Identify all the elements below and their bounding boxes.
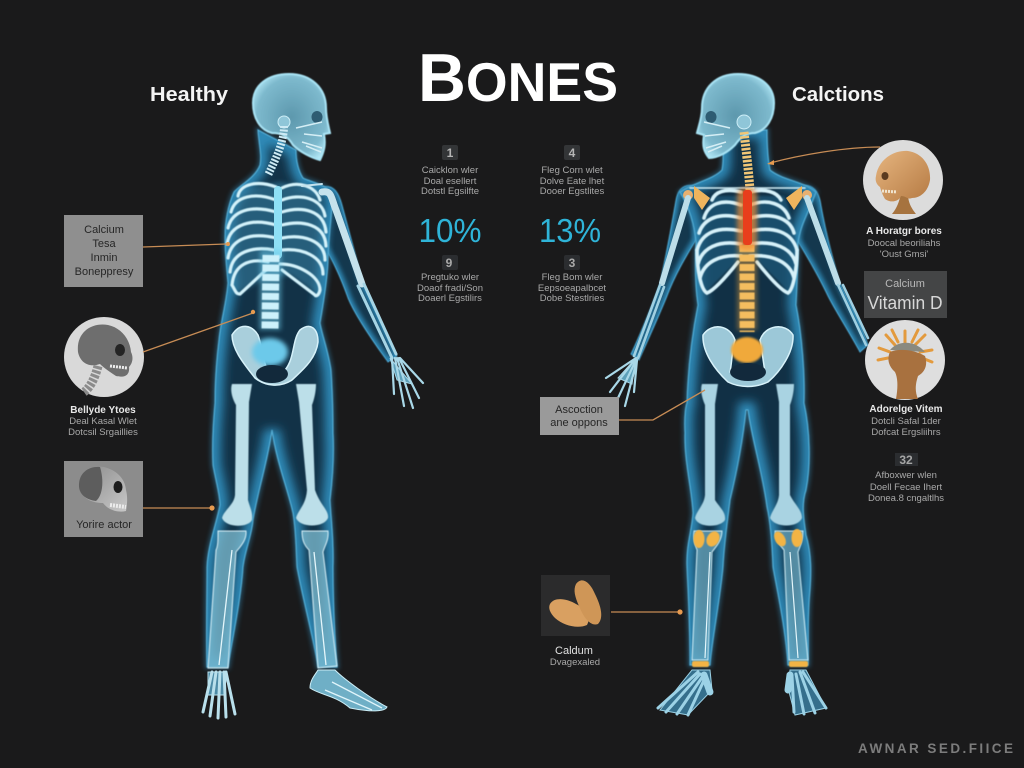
connector: tan skull to neck [767, 147, 880, 165]
text block: Doal esellert [424, 176, 477, 187]
caption: calcium nuts: Dvagexaled [550, 657, 600, 668]
callout: calcium nuts box [541, 575, 610, 636]
caption: tan skull: A Horatgr bores [866, 226, 942, 237]
badge 4: 4 [569, 146, 576, 160]
callout: vitamin D box: Vitamin D [868, 293, 942, 313]
cervical spine, highlighted [744, 132, 750, 190]
badge 3 [564, 255, 580, 270]
text block: Dolve Eate lhet [540, 176, 605, 187]
caption: tan skull: Doocal beoriliahs [868, 238, 941, 249]
text block [417, 272, 483, 304]
badge 4 [564, 145, 580, 160]
pelvis [703, 327, 793, 386]
text block: Dobe Stestlries [540, 293, 604, 304]
left figure: healthy skeleton, side view [203, 74, 423, 718]
stat block: 32: Afboxwer wlen [875, 470, 937, 481]
text block: Fleg Bom wler [542, 272, 602, 283]
arm bones [634, 198, 868, 358]
cervical spine [268, 126, 284, 175]
text block: Dooer Egstlites [540, 186, 604, 197]
stat block: 32 [868, 453, 944, 504]
title: BONES [418, 40, 618, 116]
rib cage [690, 188, 805, 293]
body silhouette [207, 130, 337, 667]
caption: radiating bone: Adorelge Vitem [869, 404, 943, 415]
caption: radiating bone [869, 404, 943, 438]
caption: skull circle [68, 405, 138, 438]
badge 9: 9 [446, 256, 453, 270]
caption: skull circle: Deal Kasal Wlet [69, 416, 137, 427]
text block [538, 272, 606, 304]
hand [390, 358, 423, 408]
lumbar spine, highlighted [737, 245, 757, 332]
caption: tan skull [866, 226, 942, 260]
callout: calcium box: Calcium [84, 224, 124, 236]
callout: calcium box: Inmin [91, 252, 117, 264]
stat column one [417, 145, 483, 304]
callout: calcium box: Tesa [92, 238, 116, 250]
callout: calcium box: Boneppresy [75, 266, 134, 278]
callout: skull circle [64, 317, 144, 397]
knee and ankle calcium highlights [692, 529, 808, 667]
connector: skull circle to spine [143, 310, 255, 352]
connector: calcium box to ribs [143, 242, 230, 247]
badge 9 [442, 255, 458, 270]
stat column two [538, 145, 606, 304]
callout: association box: ane oppons [550, 417, 608, 429]
leg bones [208, 384, 337, 668]
right foot [788, 670, 826, 715]
left foot [658, 670, 712, 715]
heading: calctions: Calctions [792, 84, 884, 106]
callout: vitamin D box [864, 271, 947, 318]
caption: calcium nuts [550, 645, 600, 668]
connector: calcium nuts to shin [611, 609, 683, 615]
caption: tan skull: 'Oust Gmsi' [880, 249, 928, 260]
callout: association box [540, 397, 619, 435]
right foot [310, 670, 387, 711]
caption: calcium nuts: Caldum [555, 645, 593, 657]
badge 1: 1 [447, 146, 454, 160]
text block [421, 165, 479, 197]
text block: Pregtuko wler [421, 272, 479, 283]
text block: Dotstl Egsilfte [421, 186, 479, 197]
skull [253, 74, 330, 160]
text block: Doaerl Egstilirs [418, 293, 482, 304]
watermark: AWNAR SED.FIICE [858, 741, 1013, 756]
text block: Fleg Corn wlet [541, 165, 603, 176]
callout: association box: Ascoction [555, 404, 603, 416]
arm silhouettes [631, 185, 868, 360]
skull [697, 74, 774, 158]
stat block: 32: Donea.8 cngaltlhs [868, 493, 944, 504]
callout: calcium box [64, 215, 143, 287]
caption: radiating bone: Dotcli Safal 1der [871, 416, 941, 427]
sternum [274, 190, 282, 255]
stat block: 32: 32 [899, 453, 913, 467]
heading: healthy: Healthy [150, 84, 229, 106]
stat 10%: 10% [418, 212, 482, 249]
callout: vitamin D box: Calcium [885, 278, 925, 290]
connector: skull box to leg [143, 505, 215, 511]
badge 1 [442, 145, 458, 160]
lumbar spine [270, 250, 271, 330]
sternum glow, red [737, 188, 757, 250]
stat 13%: 13% [539, 212, 601, 249]
badge 3: 3 [569, 256, 576, 270]
body silhouette [680, 130, 816, 665]
arm bones [302, 184, 396, 358]
left foot [203, 672, 235, 718]
caption: radiating bone: Dofcat Ergsliihrs [871, 427, 941, 438]
callout: skull box: Yorire actor [76, 519, 132, 531]
stat block: 32: Doell Fecae Ihert [870, 482, 943, 493]
text block [540, 165, 605, 197]
callout: skull box [64, 461, 143, 537]
text block: Eepsoeapalbcet [538, 283, 606, 294]
caption: skull circle: Dotcsil Srgaillies [68, 427, 138, 438]
text block: Doaof fradi/Son [417, 283, 483, 294]
callout: tan skull circle [863, 140, 943, 220]
connector: association box to hip [619, 390, 705, 420]
callout: radiating bone circle [865, 320, 945, 400]
shoulder joints [683, 186, 812, 210]
rib cage [227, 182, 326, 296]
arm silhouette [318, 186, 397, 362]
hand [606, 358, 637, 406]
text block: Caicklon wler [422, 165, 478, 176]
caption: skull circle: Bellyde Ytoes [70, 405, 136, 416]
leg bones [692, 384, 808, 660]
pelvis [232, 326, 318, 385]
right figure: skeleton with calcium highlights, front view [606, 74, 868, 715]
